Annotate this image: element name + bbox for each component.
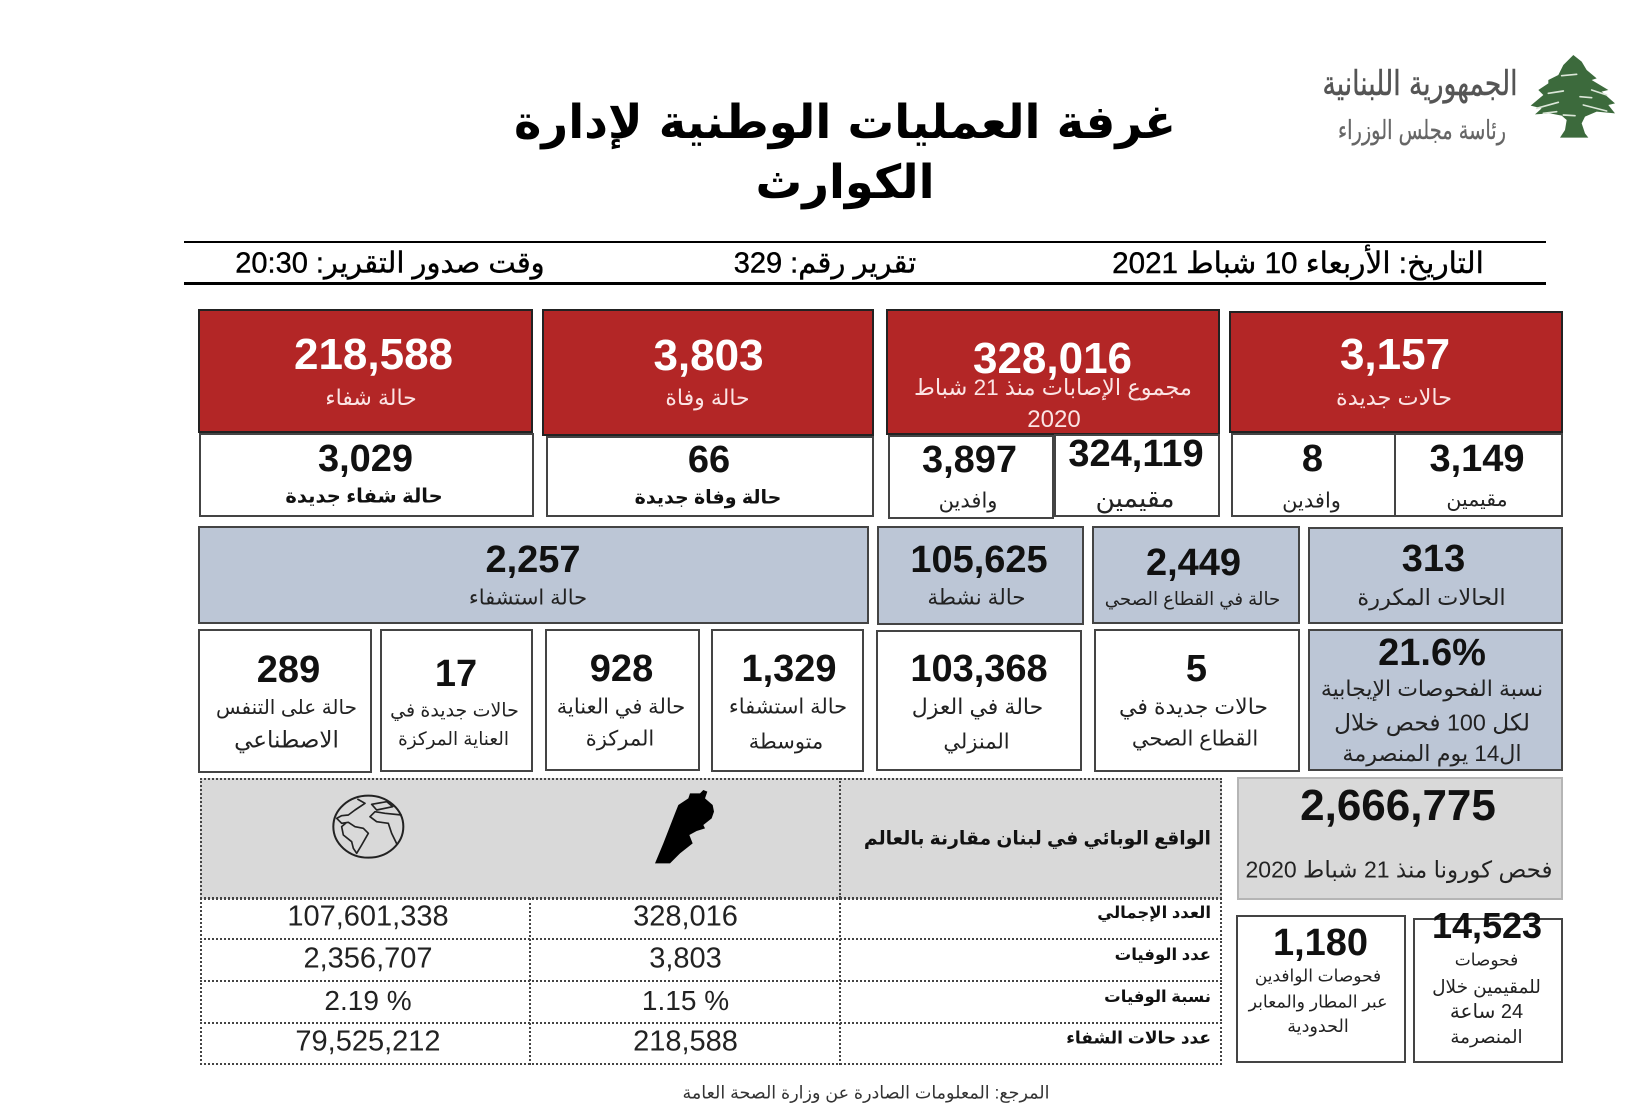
panel: total tests <box>1237 777 1563 900</box>
comparison table: 2,356,707 <box>303 942 433 974</box>
row: recoveries <box>295 1026 1211 1058</box>
panel: ICU: حالة في العناية <box>557 695 685 718</box>
panel: total cases, arrivals <box>888 435 1054 519</box>
panel: health sector cases: 2,449 <box>1146 542 1241 584</box>
panel: total tests: فحص كورونا منذ 21 شباط 2020 <box>1245 856 1553 882</box>
panel: moderate: متوسطة <box>749 730 823 753</box>
panel: hospitalised <box>198 526 868 624</box>
panel: home isolation <box>876 630 1082 771</box>
title <box>514 95 1176 210</box>
panel: total deaths: حالة وفاة <box>665 385 750 410</box>
panel: new cases, arrivals: 8 <box>1302 438 1323 480</box>
panel: active cases <box>876 526 1084 625</box>
report info bar: تقرير رقم: 329 <box>734 248 916 280</box>
panel: ICU: المركزة <box>586 728 654 750</box>
panel: new deaths: حالة وفاة جديدة <box>635 488 781 508</box>
panel: new cases, residents: 3,149 <box>1429 438 1525 480</box>
comparison table <box>200 778 1222 1065</box>
panel: total cases, residents: مقيمين <box>1095 483 1175 513</box>
panel: total recoveries: حالة شفاء <box>325 385 417 410</box>
panel: new cases <box>1229 311 1563 433</box>
panel: health sector cases: حالة في القطاع الصحي <box>1105 589 1280 609</box>
panel: new ICU cases: 17 <box>435 653 477 695</box>
panel: new ICU cases: العناية المركزة <box>398 728 509 749</box>
panel: positivity rate: نسبة الفحوصات الإيجابية <box>1321 676 1543 701</box>
panel: repeat cases: 313 <box>1402 538 1465 580</box>
panel: new health sector cases: 5 <box>1186 648 1207 690</box>
panel: total cases, arrivals: وافدين <box>939 490 997 512</box>
panel: total deaths <box>542 309 874 436</box>
panel: repeat cases: الحالات المكررة <box>1357 585 1506 610</box>
panel: moderate: 1,329 <box>741 648 837 690</box>
row: deaths <box>303 942 1211 974</box>
report info bar: وقت صدور التقرير: 20:30 <box>235 248 545 280</box>
panel: new ICU cases: حالات جديدة في <box>390 700 519 721</box>
panel: new cases: 3,157 <box>1340 330 1450 379</box>
panel: new cases: حالات جديدة <box>1336 385 1452 410</box>
comparison table: 3,803 <box>649 942 722 974</box>
panel: new ICU cases <box>380 629 532 772</box>
panel: moderate <box>711 629 864 772</box>
panel: total cases: مجموع الإصابات منذ 21 شباط <box>914 375 1192 400</box>
panel: resident tests: 14,523 <box>1432 904 1542 946</box>
panel: total deaths: 3,803 <box>653 331 764 380</box>
panel: new health sector cases <box>1094 629 1300 772</box>
panel: new health sector cases: حالات جديدة في <box>1119 694 1268 718</box>
panel: total cases <box>886 309 1220 435</box>
panel: arrival tests: 1,180 <box>1273 922 1368 964</box>
panel: ventilated: حالة على التنفس <box>216 697 357 719</box>
panel: ICU: 928 <box>590 648 653 690</box>
panel: hospitalised: حالة استشفاء <box>469 586 587 610</box>
panel: ICU <box>545 629 700 771</box>
panel: ventilated: 289 <box>257 649 320 691</box>
title: الكوارث <box>755 155 935 209</box>
panel: new recoveries: 3,029 <box>318 438 413 480</box>
source note: المرجع: المعلومات الصادرة عن وزارة الصحة العامة <box>683 1082 1049 1102</box>
panel: total tests: 2,666,775 <box>1300 780 1496 830</box>
comparison table: 2.19 % <box>324 984 412 1016</box>
panel: total cases: 328,016 <box>973 334 1132 383</box>
comparison table: عدد حالات الشفاء <box>1066 1028 1211 1048</box>
panel: arrival tests: الحدودية <box>1287 1016 1349 1036</box>
comparison table: 107,601,338 <box>287 900 449 932</box>
panel: new deaths: 66 <box>688 439 730 481</box>
panel: resident tests <box>1413 918 1563 1063</box>
panel: total recoveries <box>198 309 533 433</box>
panel: resident tests: فحوصات <box>1455 950 1518 970</box>
title: غرفة العمليات الوطنية لإدارة <box>514 95 1176 149</box>
logo text: presidency of the council of ministers <box>1322 64 1518 146</box>
panel: total cases: 2020 <box>1027 406 1081 433</box>
icon: globe <box>332 794 404 859</box>
panel: new cases, arrivals <box>1230 433 1396 517</box>
report info bar <box>184 241 1546 285</box>
panel: ventilated: الاصطناعي <box>234 726 339 752</box>
table header band <box>200 778 1222 899</box>
panel: arrival tests <box>1236 915 1406 1063</box>
panel: repeat cases <box>1308 527 1563 624</box>
panel: ventilated <box>198 629 372 773</box>
table heading: الواقع الوبائي في لبنان مقارنة بالعالم <box>864 828 1211 849</box>
icon: Lebanon map <box>655 790 714 864</box>
panel: resident tests: 24 ساعة <box>1450 1001 1523 1023</box>
panel: arrival tests: فحوصات الوافدين <box>1255 966 1381 986</box>
panel: hospitalised: 2,257 <box>485 539 581 581</box>
panel: resident tests: للمقيمين خلال <box>1432 976 1541 997</box>
panel: new deaths <box>546 436 874 517</box>
panel: health sector cases <box>1092 526 1300 624</box>
panel: new cases, residents <box>1394 433 1563 517</box>
comparison table: العدد الإجمالي <box>1097 903 1211 921</box>
panel: new health sector cases: القطاع الصحي <box>1132 728 1258 750</box>
panel: new cases, arrivals: وافدين <box>1282 490 1341 512</box>
panel: home isolation: 103,368 <box>910 648 1048 690</box>
report info bar: التاريخ: الأربعاء 10 شباط 2021 <box>1112 247 1484 280</box>
panel: new recoveries: حالة شفاء جديدة <box>285 485 443 507</box>
panel: active cases: 105,625 <box>910 539 1048 581</box>
panel: new recoveries <box>199 433 534 517</box>
panel: total cases, residents: 324,119 <box>1068 433 1204 475</box>
panel: resident tests: المنصرمة <box>1450 1026 1523 1047</box>
panel: home isolation: حالة في العزل <box>912 694 1043 718</box>
row: total cases <box>287 900 1211 932</box>
table grid <box>200 898 1222 940</box>
panel: moderate: حالة استشفاء <box>729 695 847 718</box>
panel: positivity rate: 21.6% <box>1378 632 1486 674</box>
panel: positivity rate <box>1308 629 1563 771</box>
comparison table: 1.15 % <box>642 984 729 1016</box>
panel: arrival tests: عبر المطار والمعابر <box>1249 991 1387 1011</box>
panel: total recoveries: 218,588 <box>294 330 453 378</box>
panel: total cases, residents <box>1054 434 1220 517</box>
panel: home isolation: المنزلي <box>943 730 1010 753</box>
panel: total cases, arrivals: 3,897 <box>922 439 1017 481</box>
panel: positivity rate: لكل 100 فحص خلال <box>1334 709 1530 735</box>
comparison table: عدد الوفيات <box>1115 946 1211 964</box>
comparison table: 328,016 <box>633 900 738 932</box>
panel: new cases, residents: مقيمين <box>1446 488 1508 511</box>
panel: active cases: حالة نشطة <box>927 585 1026 609</box>
icon: Lebanese cedar logo <box>1530 55 1615 138</box>
comparison table: نسبة الوفيات <box>1104 987 1211 1005</box>
comparison table: 218,588 <box>633 1026 738 1058</box>
comparison table: 79,525,212 <box>295 1026 441 1058</box>
panel: positivity rate: ال14 يوم المنصرمة <box>1342 741 1522 766</box>
row: death rate <box>324 984 1211 1016</box>
